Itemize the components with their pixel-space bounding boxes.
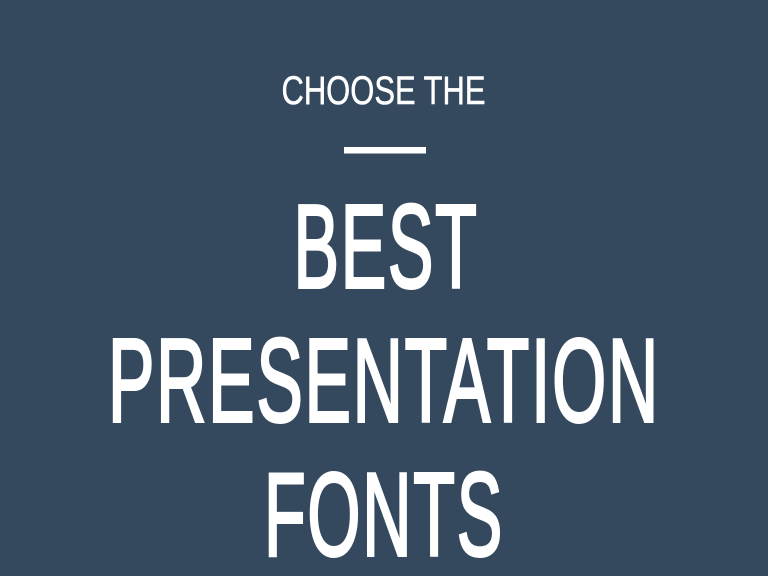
subtitle: CHOOSE THE: CHOOSE THE	[282, 69, 486, 113]
divider rule	[344, 147, 426, 154]
heading: BEST: BEST	[294, 180, 478, 314]
